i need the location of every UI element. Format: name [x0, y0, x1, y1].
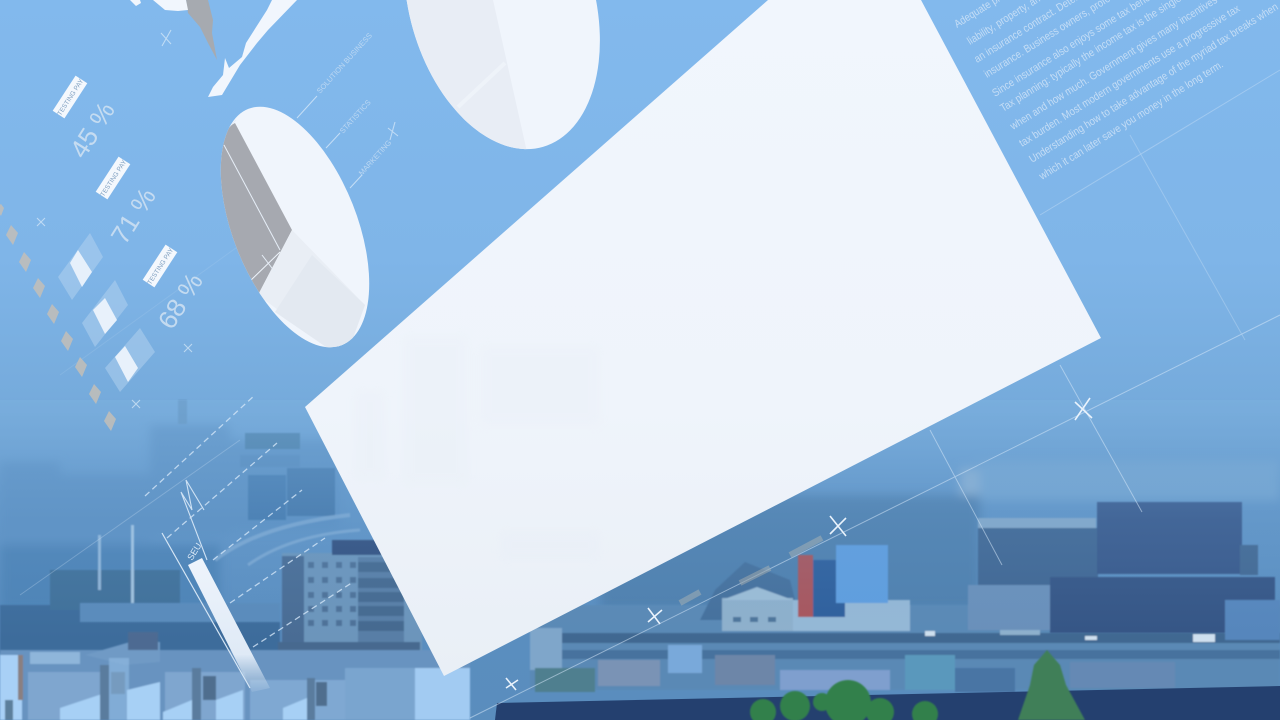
stat row: 71 percent: TESTING PAY [99, 158, 129, 198]
dashed trend lines [145, 395, 353, 647]
tower block with windows [278, 540, 422, 668]
gauge bar two [82, 280, 128, 347]
right warehouse blocks [968, 502, 1280, 640]
gauge bars [58, 233, 155, 392]
zigzag sparkline [181, 480, 207, 560]
map: grey region [186, 0, 217, 60]
stat row: 71 percent [96, 157, 162, 249]
pie callout labels [297, 31, 393, 188]
stat row: 45 percent: 45 % [64, 96, 121, 163]
faint ghost of city through card [355, 335, 600, 560]
text block: tax planning paragraph: Understanding how to take advantage of the myriad tax breaks when [1027, 1, 1280, 166]
axis line [162, 533, 250, 688]
dashes on long line [680, 538, 822, 603]
left mid-ground district [0, 400, 360, 653]
pie chart: lower [220, 33, 391, 348]
bar label: SEU [185, 541, 204, 562]
pie slice: grey [220, 123, 292, 292]
text block: tax planning paragraph: tax burden. Most modern governments use a progressive tax [1017, 3, 1243, 150]
text block: tax planning paragraph [952, 0, 1280, 183]
stat row: 68 percent: TESTING PAY [146, 246, 176, 286]
gauge bar three [105, 328, 155, 392]
pie callout labels: MARKETING [357, 138, 393, 177]
pie callout labels: SOLUTION BUSINESS [315, 31, 374, 95]
stat row: 45 percent: TESTING PAY [56, 77, 86, 117]
map fragment [130, 0, 297, 97]
text block: tax planning paragraph: which it can later save you money in the long term. [1037, 59, 1226, 183]
foreground apartments [0, 632, 470, 720]
cross markers [37, 30, 1092, 690]
far hazy skyline [0, 425, 1280, 610]
white bar [188, 558, 270, 692]
central buildings and road [530, 545, 1280, 692]
map: white islands [130, 0, 188, 11]
panel: large blank white card [305, 0, 1101, 676]
diamond markers column [0, 204, 116, 431]
stat row: 68 percent [143, 245, 209, 334]
bar chart fragment [162, 480, 270, 692]
pie slice: pale left [406, 0, 526, 150]
pie callout labels: STATISTICS [338, 98, 373, 135]
stat row: 71 percent: 71 % [105, 182, 162, 249]
stat row: 45 percent [53, 76, 121, 163]
stat row: 68 percent: 68 % [152, 267, 209, 334]
pie chart: upper [406, 0, 600, 150]
gauge bar one [58, 233, 103, 300]
city photo backdrop [0, 400, 1280, 720]
trees [750, 650, 1085, 720]
pie slice: light [259, 230, 354, 348]
haze over city [0, 400, 1280, 640]
dark roof in foreground [495, 686, 1280, 720]
map: white landmass [208, 0, 297, 97]
